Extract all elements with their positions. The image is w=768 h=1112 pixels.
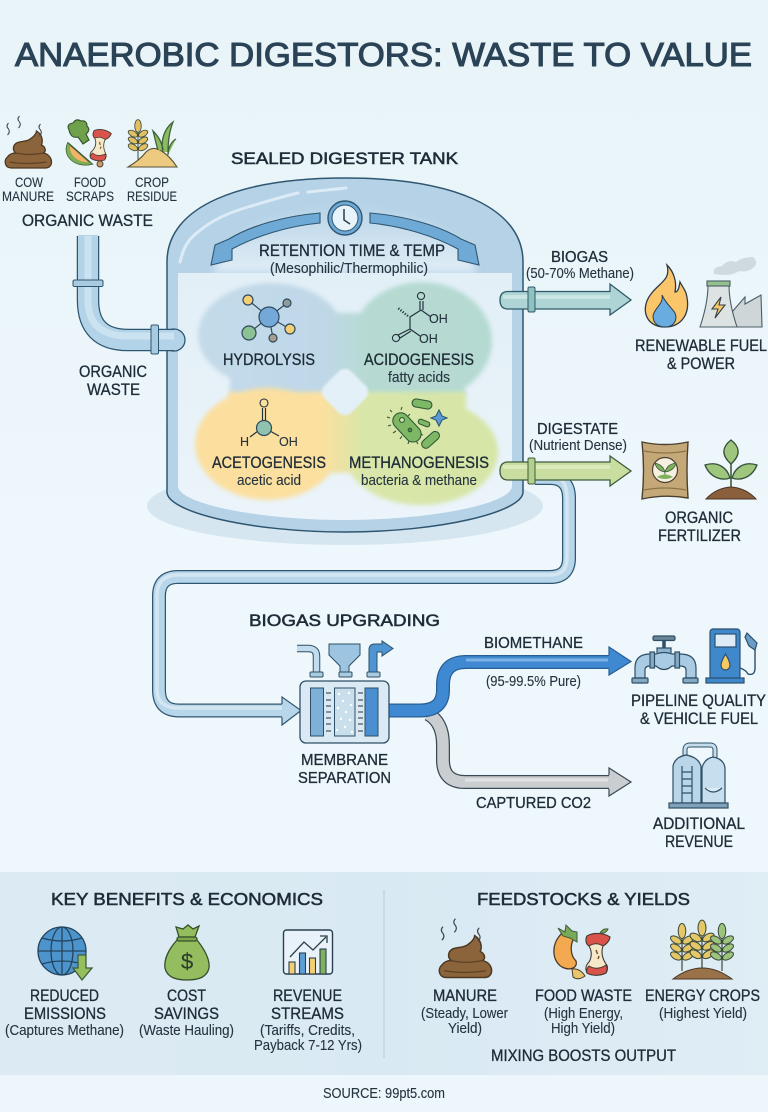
label: organic waste inlet: ORGANIC xyxy=(79,363,147,381)
label: digestate: DIGESTATE xyxy=(537,421,618,438)
label: digestate: (Nutrient Dense) xyxy=(529,438,627,454)
label: food scraps: SCRAPS xyxy=(66,188,114,204)
icon: acetic acid structure: OH xyxy=(279,435,298,449)
benefit: revenue streams xyxy=(254,930,362,1054)
label: crop residue: RESIDUE xyxy=(127,188,177,204)
panel: organic waste inputs xyxy=(2,116,177,230)
benefit: revenue streams: STREAMS xyxy=(271,1005,344,1023)
stage: acidogenesis: fatty acids xyxy=(388,370,450,386)
centre gap xyxy=(318,365,372,419)
feedstock: manure: MANURE xyxy=(433,987,497,1005)
pipe: organic waste inlet xyxy=(73,235,185,354)
label: cow manure xyxy=(2,174,54,204)
callout: mixing boosts output: MIXING BOOSTS OUTPUT xyxy=(491,1047,676,1065)
label: retention time: RETENTION TIME & TEMP xyxy=(259,242,445,260)
benefit: revenue streams: REVENUE xyxy=(273,987,342,1005)
benefit: reduced emissions: EMISSIONS xyxy=(24,1005,106,1023)
label: biogas xyxy=(526,249,634,282)
label: additional revenue: ADDITIONAL xyxy=(653,815,745,833)
label: membrane separation xyxy=(298,752,391,787)
label: organic fertilizer xyxy=(658,509,741,545)
label: membrane separation: SEPARATION xyxy=(298,770,391,787)
panel: bottom summary xyxy=(0,872,768,1075)
label: biomethane: (95-99.5% Pure) xyxy=(486,674,581,690)
icon: fertilizer bag xyxy=(642,442,688,499)
label: renewable fuel xyxy=(635,337,767,373)
tank ground shadow xyxy=(147,467,543,545)
tank liquid interior xyxy=(178,273,512,520)
icon: globe with down arrow xyxy=(38,927,92,980)
icon: membrane separation unit xyxy=(297,641,393,743)
feedstock: manure: Yield) xyxy=(448,1021,482,1037)
icon: food scraps xyxy=(66,120,112,167)
label: additional revenue: REVENUE xyxy=(665,833,733,851)
source footer: SOURCE: 99pt5.com xyxy=(323,1086,445,1102)
icon: crop residue xyxy=(127,120,177,167)
label: pipeline quality xyxy=(631,692,766,728)
heading: biogas upgrading: BIOGAS UPGRADING xyxy=(249,611,440,630)
benefit: cost savings xyxy=(139,925,234,1039)
arrow: captured co2 xyxy=(428,714,631,796)
stage: methanogenesis xyxy=(349,398,489,489)
label: cow manure: MANURE xyxy=(2,188,54,204)
feedstock: food waste: High Yield) xyxy=(551,1021,615,1037)
icon: flame xyxy=(645,265,688,327)
icon: fuel pump xyxy=(706,629,757,683)
heading: feedstocks: FEEDSTOCKS & YIELDS xyxy=(477,889,690,909)
label: organic waste inlet: WASTE xyxy=(87,381,140,399)
heading: key benefits: KEY BENEFITS & ECONOMICS xyxy=(51,889,323,909)
icon: energy crops xyxy=(669,920,735,979)
label: biogas: BIOGAS xyxy=(551,249,608,266)
icon: acid structure: OH xyxy=(429,312,448,326)
label: biomethane: BIOMETHANE xyxy=(484,635,583,652)
label: retention time: (Mesophilic/Thermophilic) xyxy=(270,261,428,277)
process blobs: lower xyxy=(195,388,498,505)
benefit: reduced emissions: (Captures Methane) xyxy=(5,1023,124,1039)
label: additional revenue xyxy=(653,815,745,851)
icon: plant xyxy=(705,440,757,499)
feedstock: food waste: FOOD WASTE xyxy=(535,987,632,1005)
label: organic fertilizer: FERTILIZER xyxy=(658,527,741,545)
icon: manure xyxy=(439,919,492,978)
arrow: retention loop left xyxy=(211,213,320,265)
label: organic fertilizer: ORGANIC xyxy=(665,509,733,527)
label: food scraps xyxy=(66,174,114,204)
benefit: cost savings: SAVINGS xyxy=(154,1005,219,1023)
icon: pipeline valve xyxy=(632,636,698,683)
icon: molecule xyxy=(242,295,295,342)
label: food scraps: FOOD xyxy=(74,174,106,190)
label: organic waste inlet xyxy=(79,363,147,399)
icon: acetic acid structure: H xyxy=(240,435,249,449)
stage: acetogenesis: acetic acid xyxy=(237,473,301,489)
stage: acidogenesis: ACIDOGENESIS xyxy=(364,351,474,369)
label: cow manure: COW xyxy=(15,174,44,190)
icon: acid structure xyxy=(392,292,448,346)
label: membrane separation: MEMBRANE xyxy=(301,752,388,769)
icon: cow manure xyxy=(5,116,51,168)
arrow: biomethane xyxy=(389,647,631,710)
benefit: reduced emissions: REDUCED xyxy=(30,987,99,1005)
benefit: cost savings: (Waste Hauling) xyxy=(139,1023,234,1039)
label: biogas: (50-70% Methane) xyxy=(526,266,634,282)
feedstock: food waste xyxy=(535,925,632,1037)
process blobs: upper xyxy=(198,282,492,400)
stage: hydrolysis xyxy=(223,295,315,369)
heading: organic waste: ORGANIC WASTE xyxy=(22,212,153,230)
label: renewable fuel: & POWER xyxy=(667,355,735,373)
title: ANAEROBIC DIGESTORS: WASTE TO VALUE xyxy=(15,37,752,74)
stage: methanogenesis: bacteria & methane xyxy=(361,473,477,489)
stage: acetogenesis xyxy=(212,399,326,489)
label: biomethane xyxy=(484,635,583,690)
heading: sealed digester tank: SEALED DIGESTER TANK xyxy=(231,149,459,168)
tank dome interior xyxy=(214,205,476,273)
icon: power plant xyxy=(700,257,762,327)
benefit: revenue streams: (Tariffs, Credits, xyxy=(260,1023,355,1039)
icon: money bag: $ xyxy=(181,949,193,974)
icon: growth chart xyxy=(284,930,332,974)
icon: storage silos xyxy=(669,745,728,808)
label: digestate xyxy=(529,421,627,454)
arrow: biogas outlet xyxy=(500,284,631,315)
pipe: digestate to upgrading xyxy=(157,476,569,725)
feedstock: manure xyxy=(421,919,508,1037)
panel: digester tank xyxy=(147,178,543,545)
benefit: reduced emissions xyxy=(5,927,124,1039)
stage: hydrolysis: HYDROLYSIS xyxy=(223,351,315,369)
feedstock: energy crops xyxy=(645,920,760,1022)
label: captured co2: CAPTURED CO2 xyxy=(476,795,591,812)
feedstock: manure: (Steady, Lower xyxy=(421,1006,508,1022)
tank shell xyxy=(167,178,523,532)
feedstock: energy crops: (Highest Yield) xyxy=(659,1006,747,1022)
label: crop residue: CROP xyxy=(135,174,169,190)
benefit: cost savings: COST xyxy=(167,987,206,1005)
benefit: revenue streams: Payback 7-12 Yrs) xyxy=(254,1038,362,1054)
feedstock: food waste: (High Energy, xyxy=(544,1006,623,1022)
icon: bacteria xyxy=(387,398,447,450)
label: retention time xyxy=(259,242,445,277)
stage: acidogenesis xyxy=(364,292,474,386)
arrow: digestate outlet xyxy=(500,456,631,486)
icon: clock xyxy=(328,201,362,235)
label: crop residue xyxy=(127,174,177,204)
icon: acetic acid structure xyxy=(240,399,298,449)
stage: acetogenesis: ACETOGENESIS xyxy=(212,454,326,472)
arrow: retention loop right xyxy=(370,213,479,265)
icon: acid structure: OH xyxy=(419,332,438,346)
stage: methanogenesis: METHANOGENESIS xyxy=(349,454,489,472)
icon: food waste xyxy=(554,925,610,979)
